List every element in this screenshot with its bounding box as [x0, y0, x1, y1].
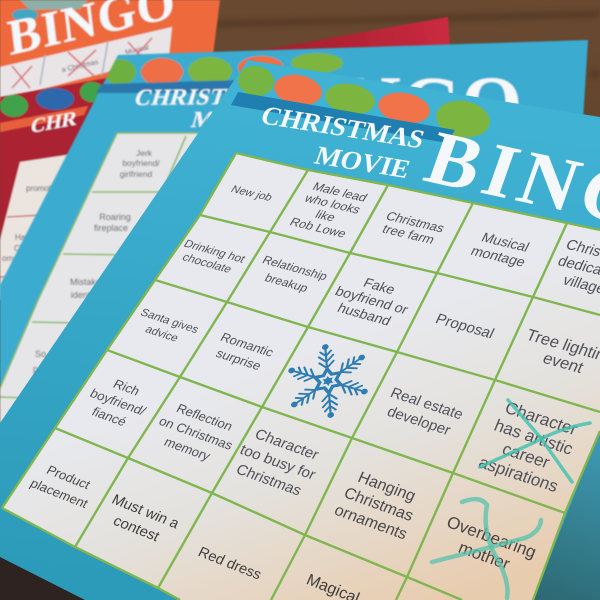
middle card decorative circles: [104, 53, 343, 86]
cell: Overbearing mother: Overbearing: [444, 512, 539, 562]
cell: Real estate developer: Real estate: [388, 385, 465, 423]
cell: Character too busy for Christmas: too busy for: [237, 442, 318, 483]
red card cells: Christmas: [14, 244, 50, 253]
cell: Male lead: like: [313, 208, 338, 224]
card: orange bingo card: [0, 0, 220, 105]
icon: snowflake free space: [285, 338, 371, 424]
decorative blobs: [12, 9, 38, 21]
cell: Rich boyfriend/fiance: fiancé: [89, 404, 129, 429]
red card cells: [0, 150, 100, 300]
cell: Fake boyfriend or husband: husband: [335, 300, 394, 328]
red card cells: Hanging: [15, 233, 45, 242]
bingo grid: [2, 153, 600, 600]
glass object at top edge: [20, 0, 88, 10]
cell: Character too busy for Christmas: Christmas: [233, 461, 304, 499]
middle card cells: Roaring: [99, 212, 131, 222]
orange card cells: [0, 27, 172, 100]
cell: Proposal: Proposal: [433, 311, 497, 342]
cell: Santa gives advice: Santa gives: [138, 307, 201, 336]
middle card title: CHRIST: [131, 85, 230, 111]
middle card cells: p: [33, 364, 38, 374]
cell: New job: New job: [228, 184, 274, 204]
cell: Relationship breakup: Relationship: [260, 253, 330, 283]
cell: Fake boyfriend or husband: boyfriend or: [333, 283, 412, 317]
front card dark stripe: [231, 92, 455, 143]
middle card large title: BINGO: [262, 60, 522, 147]
cell: Male lead: Rob Lowe: [287, 215, 349, 240]
cell: Romantic surprise: surprise: [213, 346, 264, 373]
middle card cells: identity: [71, 290, 100, 300]
cell background: [2, 153, 600, 600]
red card decorative circles: [0, 82, 104, 117]
cell: Reflection on Christmas memory: Reflection: [174, 401, 235, 434]
grid lines: [2, 153, 600, 600]
cell: Musical montage: Musical: [479, 229, 532, 254]
cell: Relationship breakup: breakup: [262, 271, 311, 295]
cell: Must win a contest: Must win a: [109, 492, 182, 532]
middle card cells: Jerk: [136, 148, 153, 158]
cell: Santa gives advice: advice: [143, 324, 180, 344]
cell: Musical montage: montage: [468, 243, 529, 270]
cell: Fake boyfriend or husband: Fake: [361, 275, 398, 297]
red card title: CHR: [29, 106, 79, 138]
cell: Product placement: placement: [28, 476, 91, 511]
front card decorative circles: [236, 63, 493, 141]
card: middle teal bingo card: [0, 40, 588, 440]
middle card cells: boyfriend/: [122, 158, 160, 168]
cell: Character has artistic career aspirations: has artistic: [491, 416, 576, 459]
title: Movie: MOVIE: [311, 140, 414, 184]
cell: Male lead: Male lead: [310, 180, 370, 204]
middle card cells: girlfriend: [120, 169, 153, 179]
middle card cells: Mistaken: [70, 277, 106, 287]
cell: Romantic surprise: Romantic: [218, 330, 277, 360]
cell: Character has artistic career aspirations: Character: [502, 398, 581, 439]
cell: Product placement: Product: [44, 462, 93, 492]
title: Christmas: CHRISTMAS: [257, 100, 428, 154]
middle card cells: fireplace: [94, 223, 128, 233]
cell: Reflection on Christmas memory: on Christmas: [156, 413, 236, 453]
cell: Red dress: Red dress: [195, 545, 264, 583]
orange card cells: a Christmas: [61, 59, 100, 74]
red card cells: ornaments: [2, 254, 40, 263]
cell: Hanging Christmas ornaments: Christmas: [341, 485, 416, 525]
cell: Hanging Christmas ornaments: ornaments: [332, 502, 410, 543]
middle card title second line: MOVIE: [188, 107, 276, 133]
marker X on Overbearing mother: [432, 499, 541, 598]
red card cells: promotion: [26, 184, 62, 193]
cell: Reflection on Christmas memory: memory: [162, 434, 213, 464]
middle card cells: So: [35, 349, 46, 359]
marker X on Character has artistic career aspirations: [480, 400, 590, 482]
cell: Hanging Christmas ornaments: Hanging: [355, 469, 418, 505]
cell: Drinking hot chocolate: Drinking hot: [181, 238, 248, 266]
red card orange stripe: [0, 106, 88, 132]
cell: Christmas tree farm: Christmas: [383, 209, 447, 235]
cell: Christmas tree farm: tree farm: [380, 222, 437, 247]
cell: Tree lighting event: event: [540, 349, 586, 377]
cell: Male lead: who looks: [301, 191, 363, 216]
cell: Rich boyfriend/fiance: Rich: [111, 377, 143, 398]
cell: Character has artistic career aspirations: career: [500, 439, 553, 472]
cell: Drinking hot chocolate: chocolate: [180, 252, 234, 276]
cell: Character has artistic career aspirations: aspirations: [476, 453, 561, 496]
cell: Overbearing mother: mother: [456, 538, 513, 574]
middle card cells: [0, 133, 260, 440]
orange card cells: Musical: [125, 44, 150, 57]
middle card dark stripe: [96, 80, 240, 93]
card: red bingo card: [0, 17, 450, 300]
cell: Rich boyfriend/fiance: boyfriend/: [87, 386, 149, 418]
cell: Real estate developer: developer: [384, 404, 453, 439]
cell: Must win a contest: contest: [110, 513, 162, 545]
cell: Character too busy for Christmas: Character: [252, 426, 322, 463]
